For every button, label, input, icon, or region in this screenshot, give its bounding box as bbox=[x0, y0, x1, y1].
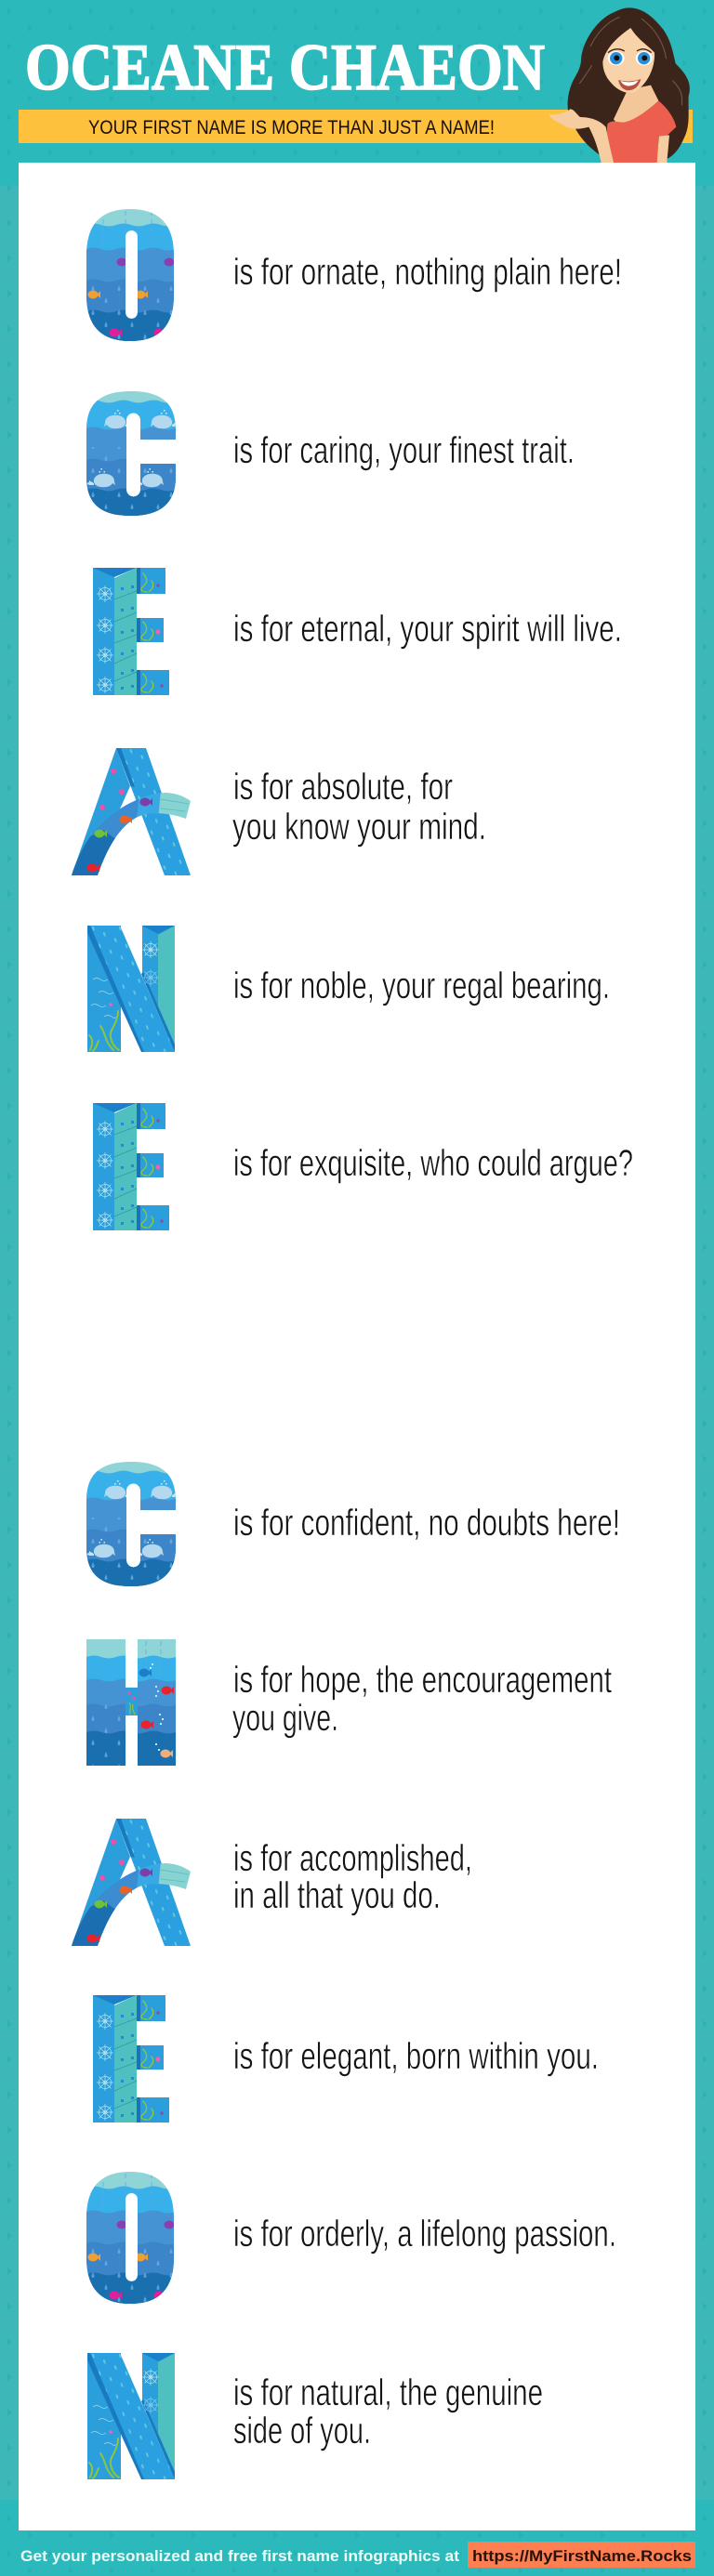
text: absolute: you know your mind. bbox=[232, 807, 486, 848]
text: accomplished bbox=[233, 1838, 472, 1916]
illustration: woman presenting bbox=[549, 7, 690, 163]
text: natural bbox=[233, 2372, 543, 2451]
letter C bbox=[86, 391, 179, 516]
letter E bbox=[93, 1103, 169, 1230]
letter E bbox=[93, 1995, 169, 2123]
letter N bbox=[87, 926, 175, 1052]
text: elegant: is for elegant, born within you. bbox=[233, 2036, 599, 2077]
letter C bbox=[86, 1462, 179, 1586]
text: absolute bbox=[232, 767, 486, 848]
title: OCEANE CHAEON bbox=[25, 32, 545, 104]
letter H bbox=[86, 1639, 176, 1766]
footer link badge bbox=[468, 2542, 695, 2568]
subtitle banner bbox=[19, 110, 693, 143]
letter O bbox=[86, 209, 177, 341]
letter E bbox=[93, 568, 169, 695]
text: accomplished: in all that you do. bbox=[233, 1875, 441, 1916]
text: absolute: is for absolute, for bbox=[233, 767, 453, 808]
text: accomplished: is for accomplished, bbox=[233, 1838, 472, 1879]
letter A bbox=[72, 748, 191, 875]
text: natural: is for natural, the genuine bbox=[233, 2372, 543, 2413]
letter O bbox=[86, 2172, 177, 2304]
letter A bbox=[72, 1819, 191, 1946]
footer link badge: https://MyFirstName.Rocks bbox=[472, 2547, 692, 2565]
text: hope: you give. bbox=[232, 1698, 338, 1739]
letter N bbox=[87, 2353, 175, 2479]
footer call to action: Get your personalized and free first name infographics at bbox=[20, 2547, 459, 2565]
text: caring: is for caring, your finest trait. bbox=[233, 430, 575, 471]
subtitle banner: YOUR FIRST NAME IS MORE THAN JUST A NAME! bbox=[88, 117, 495, 138]
text: natural: side of you. bbox=[233, 2411, 371, 2451]
text: hope bbox=[232, 1660, 612, 1739]
